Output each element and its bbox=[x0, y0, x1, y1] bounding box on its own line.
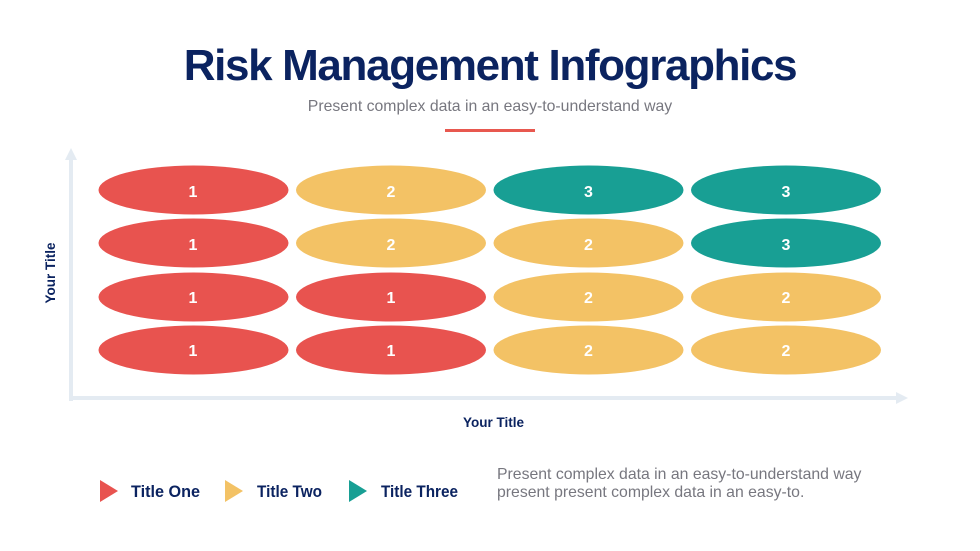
row 4 ellipses: 2 bbox=[782, 343, 791, 360]
row 3 ellipses: 2 bbox=[584, 290, 593, 307]
subtitle: Present complex data in an easy-to-understand way bbox=[308, 98, 672, 115]
legend: title two: Title Two bbox=[257, 483, 322, 501]
row 3 ellipses bbox=[98, 272, 881, 322]
description text: Present complex data in an easy-to-understand way bbox=[497, 466, 861, 483]
row 3 ellipses: 1 bbox=[387, 290, 396, 307]
title: Risk Management Infographics bbox=[184, 41, 796, 90]
row 1 ellipses bbox=[98, 166, 881, 214]
y axis label: Your Title bbox=[43, 242, 58, 304]
row 3 ellipses: 1 bbox=[189, 290, 198, 307]
legend: title two bbox=[225, 480, 322, 502]
legend: title one: Title One bbox=[131, 483, 200, 501]
row 1 ellipses: 3 bbox=[584, 184, 593, 201]
legend: title three bbox=[349, 480, 458, 502]
title underline bbox=[445, 129, 535, 132]
row 4 ellipses bbox=[98, 326, 881, 374]
description text: present present complex data in an easy-to. bbox=[497, 484, 804, 500]
row 3 ellipses: 2 bbox=[782, 290, 791, 307]
row 1 ellipses: 3 bbox=[782, 184, 791, 201]
row 1 ellipses: 2 bbox=[387, 184, 396, 201]
row 2 ellipses: 2 bbox=[584, 237, 593, 254]
row 2 ellipses bbox=[98, 218, 881, 268]
description text bbox=[497, 466, 862, 500]
x axis label: Your Title bbox=[463, 415, 524, 430]
x axis arrow bbox=[69, 392, 908, 404]
row 4 ellipses: 1 bbox=[387, 343, 396, 360]
row 1 ellipses: 1 bbox=[189, 184, 198, 201]
row 4 ellipses: 2 bbox=[584, 343, 593, 360]
y axis arrow bbox=[65, 148, 77, 401]
row 2 ellipses: 1 bbox=[189, 237, 198, 254]
row 4 ellipses: 1 bbox=[189, 343, 198, 360]
row 2 ellipses: 2 bbox=[387, 237, 396, 254]
row 2 ellipses: 3 bbox=[782, 237, 791, 254]
legend: title one bbox=[100, 480, 200, 502]
legend: title three: Title Three bbox=[381, 483, 458, 501]
